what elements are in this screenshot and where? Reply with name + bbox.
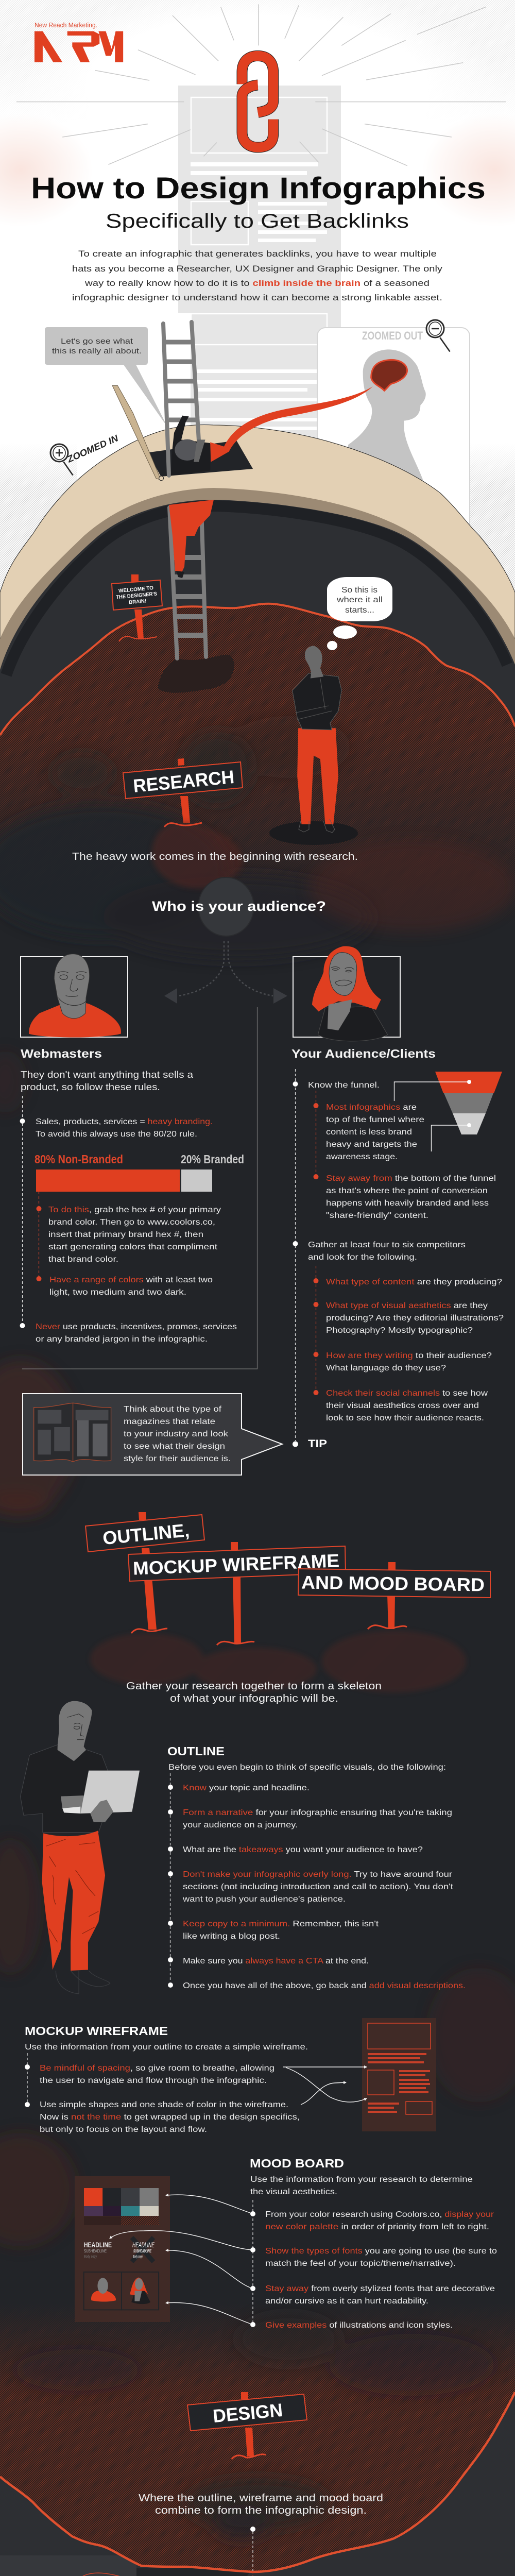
tip box: magazines: Think about the type of (124, 1405, 222, 1414)
wireframe: gray page with flow (34, 2573, 253, 2576)
climbing figure in hatch (171, 416, 210, 476)
section: mood board text: match the feel of your topic/theme/narrative). (265, 2259, 456, 2268)
thought bubble: where it all (336, 596, 383, 604)
sign: outline (85, 1515, 204, 1552)
column: audience and clients: What type of visual aesthetics are they (326, 1301, 488, 1310)
section: outline: Don't make your infographic overly long. Try to have around four (183, 1870, 453, 1879)
column: webmasters rules (20, 1070, 244, 1344)
icon: open magazine (34, 1403, 111, 1462)
font examples: SUBHEADLINE (133, 2249, 151, 2253)
ladder shadow (158, 655, 234, 693)
text: where the outline combine: Where the outline, wireframe and mood board (139, 2493, 383, 2504)
section: mood board text: new color palette in order of priority from left to right. (265, 2223, 489, 2231)
heading: webmasters: Webmasters (21, 1047, 102, 1060)
design timeline (250, 2527, 456, 2576)
tip marker (293, 1438, 327, 1450)
sun rays around the link (16, 4, 506, 166)
column: audience and clients: and look for the following. (308, 1253, 417, 1262)
column: audience and clients: happens with heavily branded and less (326, 1199, 489, 1208)
column: audience and clients: What language do they use? (326, 1364, 446, 1372)
section: mockup wireframe: but only to focus on the layout and flow. (40, 2125, 207, 2134)
column: webmasters rules: that brand color. (48, 1255, 118, 1264)
figure: thinking designer (269, 646, 358, 845)
logo top: New Reach Marketing NRM: New Reach Marketing. (35, 21, 97, 29)
section: outline: want to push your audience's patience. (182, 1895, 346, 1904)
callout: let's go see (45, 327, 168, 428)
zoomed in label (50, 433, 120, 475)
column: webmasters rules: brand color. Then go to www.coolors.co, (48, 1218, 215, 1227)
column: webmasters rules: They don't want anything that sells a (21, 1070, 194, 1080)
question: who is your audience: Who is your audience? (152, 899, 326, 914)
column: audience and clients: awareness stage. (326, 1153, 398, 1161)
intro paragraph: way to really know how to do it is to climb inside the brain of a seasoned (84, 278, 430, 288)
lower ladder and red-trousered climber (158, 500, 234, 693)
icon: magnifier minus (426, 320, 451, 351)
tip marker: TIP (308, 1438, 327, 1450)
sign: welcome to the designer's brain: WELCOME TO (118, 585, 154, 594)
section: mood board text: Use the information from your research to determine (250, 2175, 473, 2184)
column: webmasters rules: insert that primary brand hex #, then (48, 1230, 203, 1239)
sign: outline: OUTLINE, (101, 1519, 191, 1549)
intro paragraph: infographic designer to understand how it can become a strong linkable asset. (72, 293, 442, 302)
font examples: Body copy (84, 2255, 97, 2259)
tip box: magazines: to your industry and look (124, 1430, 229, 1438)
column: audience and clients: content is less brand (326, 1128, 412, 1137)
section: mockup wireframe: Be mindful of spacing , so give room to breathe, allowing (40, 2064, 274, 2073)
illustration examples (84, 2272, 159, 2310)
text: heavy work: The heavy work comes in the beginning with research. (72, 851, 358, 862)
section: mockup wireframe: Now is not the time to get wrapped up in the design specifics, (40, 2113, 300, 2122)
funnel diagram (394, 1072, 502, 1151)
dashed split arrows (164, 941, 287, 1004)
title: How to Design Infographics (31, 172, 486, 205)
section: outline: Make sure you always have a CTA at the end. (183, 1957, 369, 1965)
column: audience and clients: heavy and targets the (326, 1140, 417, 1149)
callout: let's go see: this is really all about. (52, 347, 142, 355)
section: outline (167, 1744, 466, 1990)
section: mood board text: and/or cursive as it can hurt readability. (265, 2297, 428, 2306)
section: mockup wireframe: Use simple shapes and one shade of color in the wireframe. (40, 2100, 288, 2109)
tip box: magazines: to see what their design (124, 1442, 225, 1451)
column: audience and clients (293, 1069, 504, 1441)
bar chart: 80/20: 80% Non-Branded (35, 1153, 123, 1166)
sign: design (187, 2392, 307, 2459)
font examples (84, 2238, 154, 2262)
mounds (90, 1631, 466, 1692)
hatched background blots: right and mid (0, 1839, 515, 2246)
section: mood board text: Stay away from overly stylized fonts that are decorative (265, 2284, 495, 2293)
sign: welcome to the designer's brain: BRAIN! (129, 598, 147, 605)
sign group: outline, mockup wireframe and mood board (85, 1512, 490, 1692)
tip box: magazines: style for their audience is. (124, 1454, 231, 1463)
column: audience and clients: Most infographics are (326, 1103, 417, 1112)
arrow: brain to hatch (210, 386, 373, 462)
column: audience and clients: "share-friendly" content. (326, 1211, 428, 1220)
column: webmasters rules: Sales, products, services = heavy branding. (36, 1117, 213, 1126)
upper ladder (163, 322, 199, 476)
text: gather your research: of what your infographic will be. (170, 1693, 338, 1704)
lower head interior background (0, 2391, 515, 2576)
font examples: SUBHEADLINE (84, 2248, 107, 2253)
portrait: your audience (293, 946, 400, 1041)
section: outline: your audience on a journey. (183, 1821, 298, 1829)
column: webmasters rules: Never use products, incentives, promos, services (36, 1323, 237, 1331)
section: mockup wireframe (25, 2024, 308, 2134)
sign: research (123, 758, 243, 888)
section: mood board text: From your color research using Coolors.co, display your (265, 2210, 494, 2219)
arrows: wireframe callouts (283, 2067, 367, 2105)
section: mockup wireframe: the user to navigate and flow through the infographic. (40, 2076, 267, 2085)
thought bubble: So this is (341, 586, 377, 595)
brain: top edge and hatched mass (0, 604, 515, 1041)
section: outline: Know your topic and headline. (183, 1784, 310, 1792)
section: outline: like writing a blog post. (183, 1932, 280, 1941)
icon: magnifier plus (50, 444, 74, 475)
color palette (84, 2188, 159, 2225)
sign: research: RESEARCH (132, 766, 235, 796)
section: mood board text: the visual aesthetics. (250, 2188, 337, 2196)
column: webmasters rules: product, so follow these rules. (21, 1082, 160, 1092)
bar chart: 80/20: 20% Branded (181, 1153, 244, 1166)
panel: zoomed out silhouette: ZOOMED OUT (362, 329, 423, 342)
question: who is your audience (152, 877, 326, 936)
head: skin, brown band and dark interior (0, 425, 515, 824)
callout: let's go see: Let's go see what (61, 337, 133, 346)
column: audience and clients: their visual aesthetics cross over and (326, 1401, 479, 1410)
mound under the sign (152, 822, 243, 888)
section: mood board text (250, 2157, 497, 2330)
column: audience and clients: look to see how their audience reacts. (326, 1414, 484, 1422)
section: outline: sections (not including introduction and call to action). You don't (183, 1883, 454, 1891)
column: audience and clients: Gather at least four to six competitors (308, 1241, 466, 1249)
thought bubble: starts... (345, 606, 374, 615)
section: outline: Keep copy to a minimum. Remember, this isn't (183, 1920, 379, 1928)
icon: head silhouette with brain (348, 349, 426, 536)
intro paragraph: To create an infographic that generates backlinks, you have to wear multiple (78, 249, 437, 259)
section: mood board text: Give examples of illustrations and icon styles. (265, 2321, 453, 2330)
section: mood board text: Show the types of fonts you are going to use (be sure to (265, 2247, 497, 2256)
section: outline: Form a narrative for your infographic ensuring that you're taking (183, 1808, 452, 1817)
top of head: open hatch (112, 385, 253, 481)
section: mood board thumbnail (75, 2176, 170, 2322)
column: audience and clients: top of the funnel where (326, 1115, 424, 1124)
column: audience and clients: Know the funnel. (308, 1081, 380, 1090)
sign: mockup wireframe: MOCKUP WIREFRAME (132, 1550, 340, 1579)
divider box line (22, 1007, 258, 1369)
column: webmasters rules: To do this , grab the hex # of your primary (48, 1206, 221, 1214)
subtitle: Specifically to Get Backlinks (106, 210, 409, 232)
section: mood board text: MOOD BOARD (250, 2157, 344, 2170)
figure: man with laptop (21, 1701, 140, 1994)
sign: welcome to the designer's brain: THE DESIGNER'S (116, 591, 158, 600)
text: gather your research: Gather your research together to form a skeleton (126, 1681, 382, 1692)
column: webmasters rules: To avoid this always use the 80/20 rule. (36, 1130, 197, 1139)
tip box: magazines: magazines that relate (124, 1417, 215, 1426)
wireframe thumbnail (362, 2018, 436, 2131)
brain: lower hatched mass and edge (0, 2303, 515, 2572)
portrait: webmasters (21, 954, 128, 1038)
column: webmasters rules: or any branded jargon in the infographic. (36, 1335, 208, 1344)
intro paragraph (72, 249, 443, 302)
section: mockup wireframe: Use the information from your outline to create a simple wireframe. (25, 2043, 308, 2052)
background web page document (178, 86, 341, 442)
section: outline: What are the takeaways you want your audience to have? (183, 1845, 423, 1854)
section: outline: Once you have all of the above, go back and add visual descriptions. (183, 1981, 466, 1990)
section: outline: Before you even begin to think of specific visuals, do the following: (168, 1763, 446, 1772)
hero background: white with hatching (0, 0, 515, 670)
column: webmasters rules: Have a range of colors with at least two (49, 1276, 213, 1284)
arrow: logical flow (67, 2573, 253, 2576)
trapdoor (112, 385, 161, 480)
text: gather your research (126, 1681, 382, 1704)
zoomed in label: ZOOMED IN (65, 433, 120, 465)
font examples: HEADLINE (132, 2241, 154, 2249)
column: audience and clients: producing? Are they editorial illustrations? (326, 1314, 504, 1323)
heading: your audience / clients: Your Audience/Clients (291, 1047, 436, 1060)
column: audience and clients: What type of content are they producing? (326, 1278, 502, 1286)
column: webmasters rules: start generating colors that compliment (48, 1243, 218, 1251)
bar chart: 80/20 (35, 1153, 244, 1192)
column: webmasters rules: light, two medium and two dark. (49, 1288, 186, 1297)
intro paragraph: hats as you become a Researcher, UX Designer and Graphic Designer. The only (72, 264, 443, 274)
font examples: HEADLINE (84, 2241, 112, 2249)
column: audience and clients: as that's where the point of conversion (326, 1187, 488, 1195)
section: outline: OUTLINE (167, 1744, 225, 1758)
text: where the outline combine: combine to form the infographic design. (155, 2505, 367, 2516)
icon: chain link (242, 56, 273, 147)
panel: zoomed out silhouette (317, 320, 470, 596)
font examples: Body copy (133, 2255, 143, 2259)
thought bubble (327, 577, 392, 650)
column: audience and clients: Check their social channels to see how (326, 1389, 488, 1398)
sign: and mood board: AND MOOD BOARD (301, 1572, 485, 1595)
column: audience and clients: How are they writing to their audience? (326, 1351, 492, 1360)
column: audience and clients: Stay away from the bottom of the funnel (326, 1174, 496, 1183)
sign: welcome to the designer's brain (112, 574, 162, 641)
logo top: New Reach Marketing NRM (35, 21, 123, 62)
tip box: magazines (23, 1394, 282, 1475)
column: audience and clients: Photography? Mostly typographic? (326, 1326, 473, 1335)
text: where the outline combine (139, 2493, 383, 2516)
sign: design: DESIGN (212, 2399, 284, 2427)
section: mockup wireframe: MOCKUP WIREFRAME (25, 2024, 168, 2038)
arrows: mood board callouts (110, 2195, 253, 2325)
hatched background blots: left (0, 1051, 77, 1517)
